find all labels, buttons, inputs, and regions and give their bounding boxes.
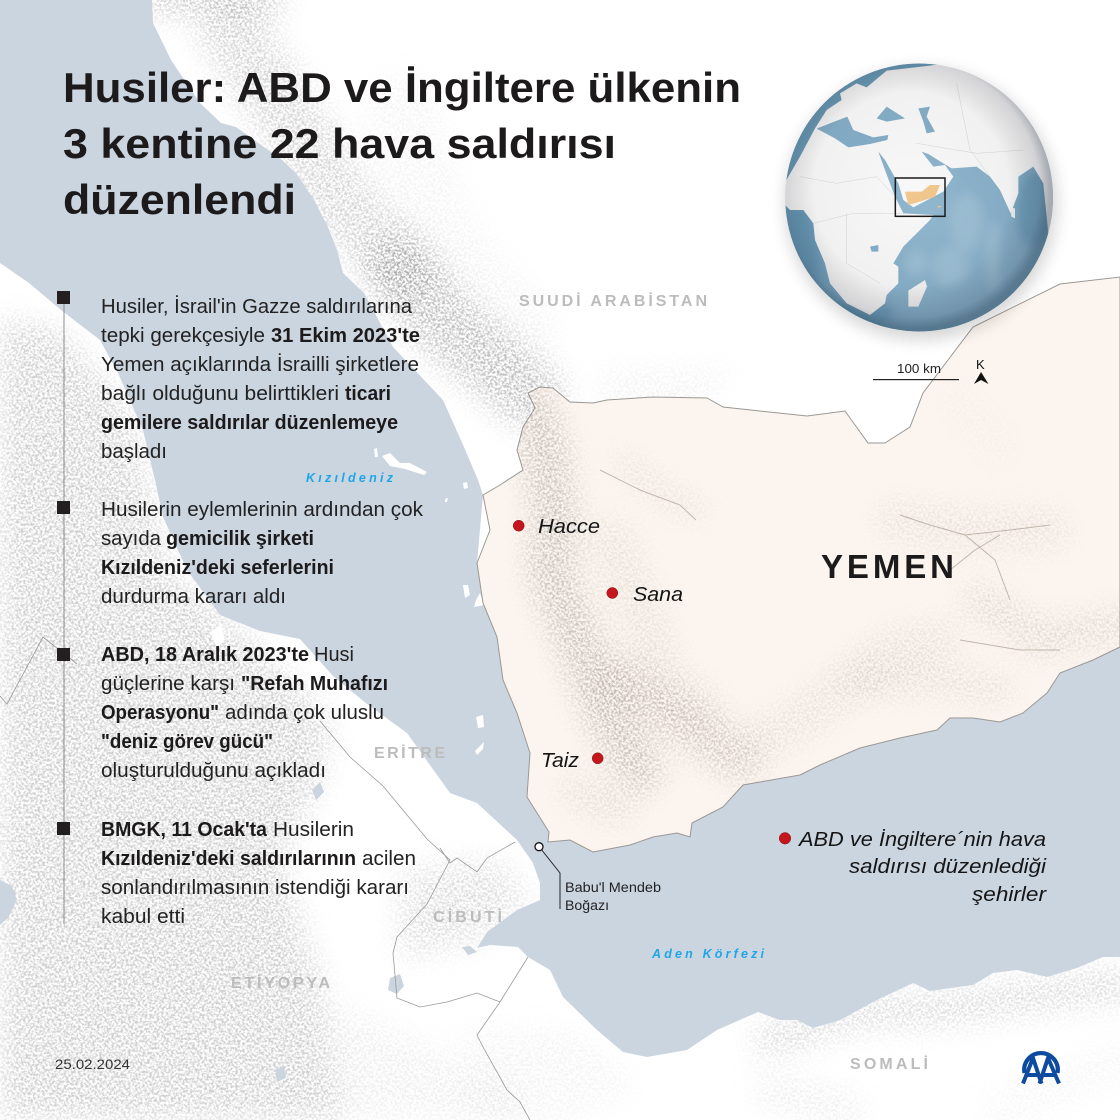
- map title: 3 kentine 22 hava saldırısı: [63, 120, 616, 167]
- city: Taiz: Taiz: [541, 750, 579, 772]
- text block 1: [57, 291, 420, 463]
- country labels: ETİYOPYA: [231, 974, 330, 992]
- scale bar: 100 km: [897, 361, 941, 376]
- country labels: [231, 292, 928, 1073]
- text block 4: kabul etti: [101, 906, 185, 928]
- islands and lakes: [0, 448, 484, 1082]
- legend: ABD ve İngiltere´nin hava: [798, 829, 1046, 851]
- legend: [779, 829, 1048, 906]
- text block 1: bağlı olduğunu belirttikleri: [101, 383, 339, 405]
- callout: Babu'l Mendeb: Babu'l Mendeb: [565, 880, 661, 895]
- text block 4: Kızıldeniz'deki saldırılarının: [101, 848, 356, 870]
- bullet 4: [57, 822, 70, 835]
- text block 3: [57, 644, 388, 782]
- country labels: SOMALİ: [850, 1055, 928, 1073]
- text block 4: Husilerin: [273, 819, 354, 841]
- wadis: [600, 470, 1060, 650]
- water labels: Aden Körfezi: [651, 947, 765, 961]
- map title: [63, 64, 741, 223]
- callout: Babu'l Mendeb: Boğazı: [565, 898, 609, 913]
- bullet 3: [57, 648, 70, 661]
- text block 4: sonlandırılmasının istendiği kararı: [101, 877, 409, 899]
- callout: Babu'l Mendeb: [535, 843, 661, 913]
- text block 1: ticari: [345, 383, 391, 405]
- city: Hacce: [513, 516, 600, 538]
- text block 1: Husiler, İsrail'in Gazze saldırılarına: [101, 295, 413, 318]
- Yemen highlight: [905, 185, 940, 205]
- text block 3: ABD, 18 Aralık 2023'te: [101, 644, 309, 666]
- country borders: [0, 637, 530, 1120]
- country label: Yemen: YEMEN: [821, 548, 954, 585]
- text block 2: sayıda: [101, 528, 162, 550]
- country labels: CİBUTİ: [433, 908, 502, 926]
- bullet 1: [57, 291, 70, 304]
- text block 4: BMGK, 11 Ocak'ta: [101, 819, 268, 841]
- text block 3: güçlerine karşı: [101, 673, 235, 695]
- text block 3: oluşturulduğunu açıkladı: [101, 760, 326, 782]
- globe locator: [777, 50, 1070, 340]
- bullet 2: [57, 501, 70, 514]
- text block 3: "Refah Muhafızı: [241, 673, 388, 695]
- city: Sana: Sana: [633, 584, 683, 606]
- text block 3: Husi: [314, 644, 354, 666]
- date: 25.02.2024: [55, 1057, 131, 1072]
- timeline line: [64, 297, 65, 924]
- country labels: SUUDİ ARABİSTAN: [519, 292, 707, 310]
- text block 4: [57, 819, 416, 928]
- city: Hacce: Hacce: [538, 516, 600, 538]
- text block 1: Yemen açıklarında İsrailli şirketlere: [101, 353, 419, 376]
- text block 2: [57, 499, 424, 608]
- water labels: Kızıldeniz: [306, 471, 394, 485]
- text block 1: 31 Ekim 2023'te: [271, 325, 420, 347]
- text block 3: Operasyonu": [101, 702, 219, 724]
- city: Taiz: [541, 750, 603, 772]
- text block 4: acilen: [362, 848, 416, 870]
- Yemen highlands texture: [530, 400, 1120, 810]
- country labels: ERİTRE: [374, 744, 445, 762]
- text block 1: gemilere saldırılar düzenlemeye: [101, 412, 398, 434]
- Yemen territory: [477, 277, 1120, 852]
- text block 3: adında çok uluslu: [225, 702, 384, 724]
- city: Sana: [607, 584, 683, 606]
- icon: AA logo: [1023, 1053, 1059, 1084]
- map title: Husiler: ABD ve İngiltere ülkenin: [63, 64, 741, 111]
- text block 1: başladı: [101, 441, 167, 463]
- text block 3: "deniz görev gücü": [101, 731, 273, 753]
- legend: saldırısı düzenlediği: [849, 856, 1047, 878]
- icon: north arrow: K: [976, 357, 985, 372]
- icon: north arrow: [974, 357, 988, 384]
- text block 2: durdurma kararı aldı: [101, 586, 286, 608]
- text block 2: Kızıldeniz'deki seferlerini: [101, 557, 334, 579]
- text block 1: tepki gerekçesiyle: [101, 325, 265, 347]
- locator box: [895, 178, 945, 216]
- scale bar: [873, 361, 959, 380]
- text block 2: gemicilik şirketi: [166, 528, 314, 550]
- text block 2: Husilerin eylemlerinin ardından çok: [101, 499, 424, 521]
- legend: şehirler: [972, 884, 1048, 906]
- map title: düzenlendi: [63, 176, 296, 223]
- globe land masses: [785, 64, 1054, 315]
- water labels: [306, 471, 765, 961]
